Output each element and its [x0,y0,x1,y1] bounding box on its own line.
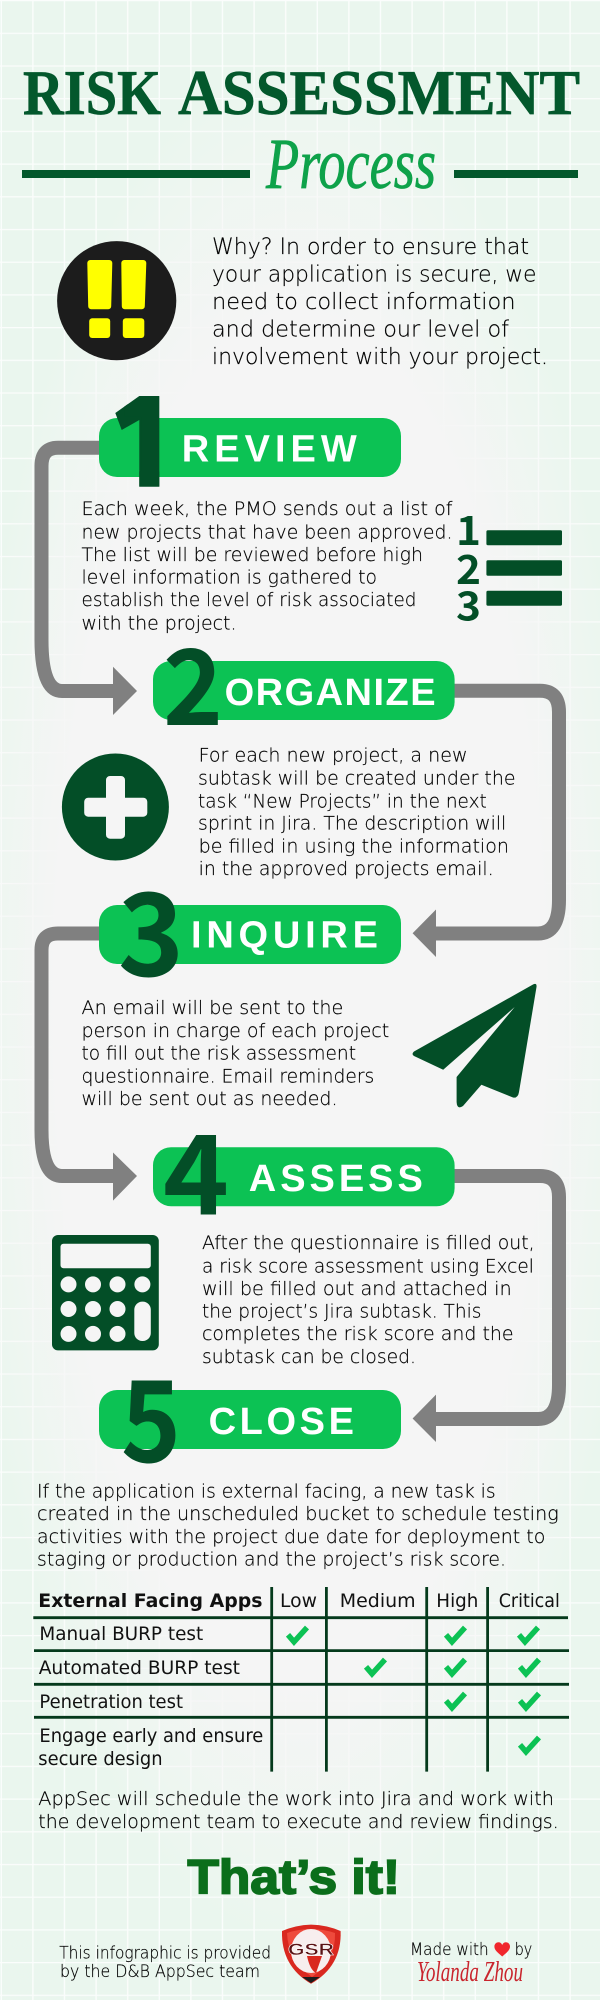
table header row: Medium [340,1590,416,1612]
intro text: involvement with your project. [212,345,548,370]
icon: calculator [52,1235,159,1350]
closing text: AppSec will schedule the work into Jira and work with [38,1788,554,1810]
intro text: your application is secure, we [212,263,536,288]
table row labels: Automated BURP test [39,1657,240,1679]
arrow: assess to close [413,1176,559,1442]
intro text [212,235,548,370]
footer: provider credit: by the D&B AppSec team [60,1962,260,1981]
step 4 header: assess: ASSESS [249,1158,423,1200]
step 3 header: inquire: INQUIRE [191,914,378,956]
icon: numbered list [456,499,562,632]
table header row: Critical [499,1590,560,1612]
arrow: organize to inquire [413,691,559,957]
intro text: Why? In order to ensure that [212,235,529,260]
step 1 text [82,498,453,634]
icon: numbered list: 2 [456,538,481,596]
table row labels: Engage early and ensure [39,1725,263,1747]
step 1 text: Each week, the PMO sends out a list of [82,498,453,520]
icon: heart [494,1942,510,1956]
step 1 text: The list will be reviewed before high [82,544,423,566]
step 3 text: person in charge of each project [82,1020,389,1042]
closing text [38,1788,559,1833]
footer: provider credit [59,1944,271,1981]
table row labels [38,1623,263,1770]
icon: exclamation marks [57,241,176,360]
step 2 text: be filled in using the information [199,835,509,857]
table check marks [288,1628,539,1752]
step 3 header: inquire: 3 [118,844,184,1010]
subtitle: Process: Process [265,124,436,204]
step 4 text: After the questionnaire is filled out, [202,1232,535,1254]
table: external facing apps [33,1587,569,1772]
step 4 text: a risk score assessment using Excel [202,1256,534,1278]
arrow: inquire to assess [42,934,137,1201]
table header row: High [436,1590,478,1612]
table row labels: secure design [38,1748,163,1770]
closing text: the development team to execute and review findings. [38,1811,559,1833]
table header row: External Facing Apps [38,1590,262,1612]
step 5 header: close [99,1331,401,1495]
footer: made with love: Made with [410,1940,489,1959]
step 3 text: to fill out the risk assessment [82,1043,356,1065]
step 2 header: organize [153,604,455,756]
step 2 text: For each new project, a new [199,745,468,767]
step 2 text: subtask will be created under the [198,767,516,789]
step 4 text: completes the risk score and the [202,1323,514,1345]
step 4 text: the project’s Jira subtask. This [202,1300,481,1322]
step 4 text: subtask can be closed. [202,1346,416,1368]
table header row [38,1590,560,1612]
icon: numbered list: 1 [456,499,481,557]
icon: numbered list: 3 [456,574,481,632]
step 1 text: level information is gathered to [82,566,377,588]
heading: that's it: That’s it! [188,1852,400,1905]
footer: provider credit: This infographic is provided [59,1944,271,1963]
step 4 text [202,1232,535,1368]
table row labels: Manual BURP test [39,1623,203,1645]
footer: made with love: Yolanda Zhou [417,1957,523,1988]
icon: GSR shield logo: GSR [288,1940,334,1959]
step 3 text: will be sent out as needed. [82,1088,338,1110]
step 1 header: review [99,396,401,487]
arrow: review to organize [42,448,137,715]
step 5 header: close: CLOSE [209,1401,354,1443]
footer: made with love [410,1940,532,1988]
step 3 text [82,997,389,1110]
icon: plus [62,754,169,860]
icon: paper plane [412,984,537,1107]
step 2 text [198,745,516,880]
intro text: need to collect information [212,290,516,315]
step 3 text: questionnaire. Email reminders [82,1065,374,1087]
step 2 text: task “New Projects” in the next [198,790,487,812]
step 1 text: new projects that have been approved. [82,521,452,543]
icon: GSR shield logo [282,1925,341,1984]
step 3 header: inquire [99,844,401,1010]
step 1 text: establish the level of risk associated [82,589,416,611]
step 1 header: review: REVIEW [182,429,357,471]
step 3 text: An email will be sent to the [82,997,343,1019]
step 4 header: assess: 4 [163,1087,229,1247]
step 2 header: organize: 2 [163,604,223,756]
table header row: Low [280,1590,317,1612]
step 5 text: created in the unscheduled bucket to schedule testing [37,1503,559,1525]
step 5 text [37,1480,559,1571]
step 5 text: staging or production and the project’s risk score. [37,1549,506,1571]
step 5 text: If the application is external facing, a new task is [37,1480,496,1502]
intro text: and determine our level of [212,318,509,343]
subtitle: Process [22,124,578,204]
footer: made with love: by [515,1940,532,1959]
step 1 text: with the project. [82,612,236,634]
title: ASSESSMENT [178,58,580,128]
step 5 header: close: 5 [121,1331,181,1495]
step 2 text: in the approved projects email. [199,858,494,880]
step 2 header: organize: ORGANIZE [225,672,436,714]
step 2 text: sprint in Jira. The description will [198,812,506,834]
title: RISK [23,58,161,128]
table row labels: Penetration test [39,1691,183,1713]
step 5 text: activities with the project due date for deployment to [37,1526,545,1548]
step 4 header: assess [153,1087,455,1247]
step 4 text: will be filled out and attached in [202,1278,512,1300]
step 1 header: review: 1 [111,343,184,523]
